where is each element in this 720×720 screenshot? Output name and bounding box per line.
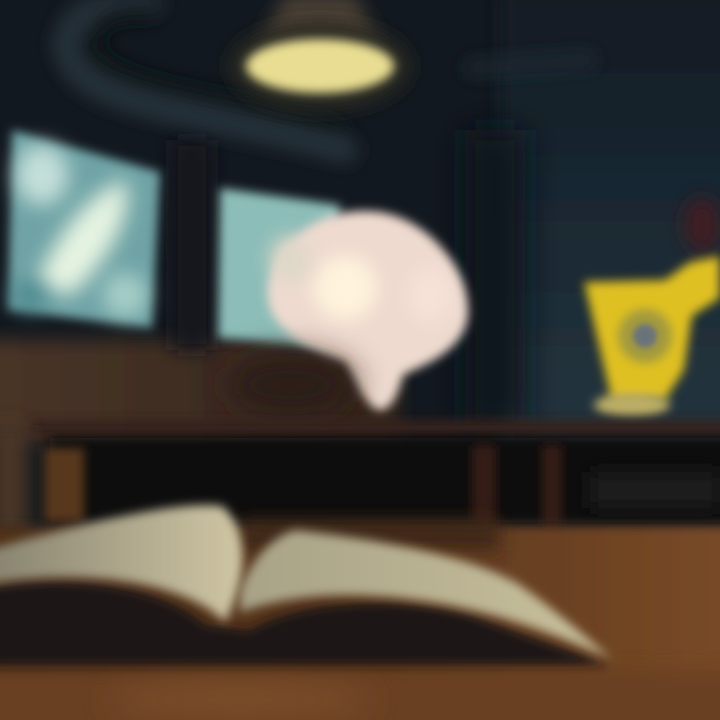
yellow scale ornament: [584, 197, 720, 417]
table: [0, 520, 720, 720]
open book: [0, 505, 612, 665]
window: centre: [218, 188, 340, 348]
ceiling swirl: [66, 5, 590, 150]
right page: [240, 530, 612, 660]
thought brain: [267, 211, 468, 410]
silhouette under brain: [225, 355, 355, 415]
ceiling lamp: [230, 0, 410, 110]
lamp shade: [260, 0, 380, 45]
left page: [0, 505, 242, 622]
book underside: [0, 582, 610, 665]
window: left: [8, 130, 160, 328]
lamp glow: [246, 39, 394, 93]
shelf: [0, 420, 720, 535]
